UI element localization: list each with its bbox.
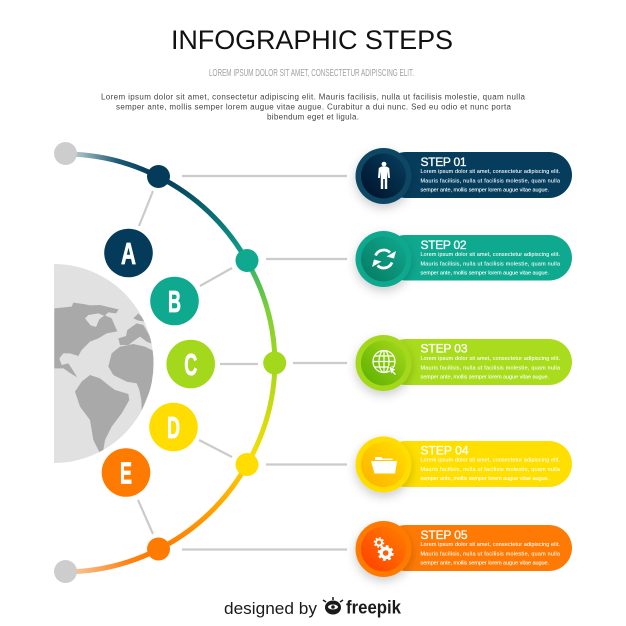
step 05 text: semper ante, mollis semper lorem augue vitae augue. (420, 560, 549, 566)
icon: sync arrows (372, 250, 396, 268)
step 04 text (420, 444, 560, 482)
icon: freepik mascot (323, 597, 343, 614)
step 03 text: Lorem ipsum dolor sit amet, consectetur adipiscing elit. (420, 356, 560, 362)
curved timeline arc (66, 154, 275, 572)
timeline start and end dots (54, 142, 77, 583)
letter badge E (102, 448, 150, 497)
step 02 text: semper ante, mollis semper lorem augue vitae augue. (420, 270, 549, 276)
icon: globe with cursor (373, 350, 396, 376)
intro paragraph (101, 92, 526, 122)
intro paragraph: semper ante, mollis semper lorem augue vitae augue. Curabitur a dui nunc. Sed eu odio et nunc porta (116, 102, 512, 112)
letter badge A: A (121, 236, 136, 271)
step 05 text (420, 528, 560, 566)
step 01 text: Lorem ipsum dolor sit amet, consectetur adipiscing elit. (420, 169, 560, 175)
letter badge B (150, 277, 199, 325)
footer credit (224, 597, 402, 618)
icon: gears (374, 538, 393, 560)
intro paragraph: Lorem ipsum dolor sit amet, consectetur adipiscing elit. Mauris facilisis, nulla ut facilisis molestie, quam nulla (101, 92, 526, 102)
step 02 text: Lorem ipsum dolor sit amet, consectetur adipiscing elit. (420, 252, 560, 258)
panel: step 05 (356, 521, 572, 577)
panel: step 02 (356, 231, 572, 287)
letter badge C (166, 340, 215, 388)
step 05 text: STEP 05 (420, 528, 468, 542)
connector lines (138, 176, 347, 550)
footer credit: freepik (346, 598, 402, 618)
step 01 text: Mauris facilisis, nulla ut facilisis molestie, quam nulla (420, 178, 560, 184)
step 03 text: Mauris facilisis, nulla ut facilisis molestie, quam nulla (420, 366, 560, 372)
step 05 text: Mauris facilisis, nulla ut facilisis molestie, quam nulla (420, 552, 560, 558)
step 04 text: Lorem ipsum dolor sit amet, consectetur adipiscing elit. (420, 458, 560, 464)
footer credit: designed by (224, 599, 318, 618)
globe (54, 264, 155, 464)
intro paragraph: bibendum eget et ligula. (267, 112, 359, 122)
letter badge C: C (184, 347, 197, 382)
step 01 text: STEP 01 (420, 155, 467, 169)
letter badge B: B (168, 284, 181, 319)
letter badge D (149, 403, 198, 451)
step 03 text: STEP 03 (420, 342, 468, 356)
icon: person (378, 162, 390, 189)
step 01 text: semper ante, mollis semper lorem augue vitae augue. (420, 188, 549, 194)
title: INFOGRAPHIC STEPS (171, 25, 453, 55)
letter badge E: E (120, 456, 132, 490)
timeline nodes (147, 165, 286, 560)
icon: folder (371, 457, 397, 474)
panel: step 03 (356, 335, 572, 391)
step 04 text: STEP 04 (420, 444, 469, 458)
letter badge D: D (167, 410, 180, 445)
step 05 text: Lorem ipsum dolor sit amet, consectetur adipiscing elit. (420, 542, 560, 548)
step 01 text (420, 155, 560, 194)
panel: step 04 (356, 436, 572, 492)
infographic canvas (54, 30, 572, 618)
step 02 text: STEP 02 (420, 238, 467, 252)
step 03 text (420, 342, 560, 380)
letter badge A (104, 229, 153, 277)
step 03 text: semper ante, mollis semper lorem augue vitae augue. (420, 374, 549, 380)
step 02 text: Mauris facilisis, nulla ut facilisis molestie, quam nulla (420, 262, 560, 268)
panel: step 01 (356, 148, 572, 204)
step 04 text: semper ante, mollis semper lorem augue vitae augue. (420, 476, 549, 482)
step 04 text: Mauris facilisis, nulla ut facilisis molestie, quam nulla (420, 467, 560, 473)
step 02 text (420, 238, 560, 276)
subtitle: LOREM IPSUM DOLOR SIT AMET, CONSECTETUR ADIPISCING ELIT. (209, 67, 414, 79)
